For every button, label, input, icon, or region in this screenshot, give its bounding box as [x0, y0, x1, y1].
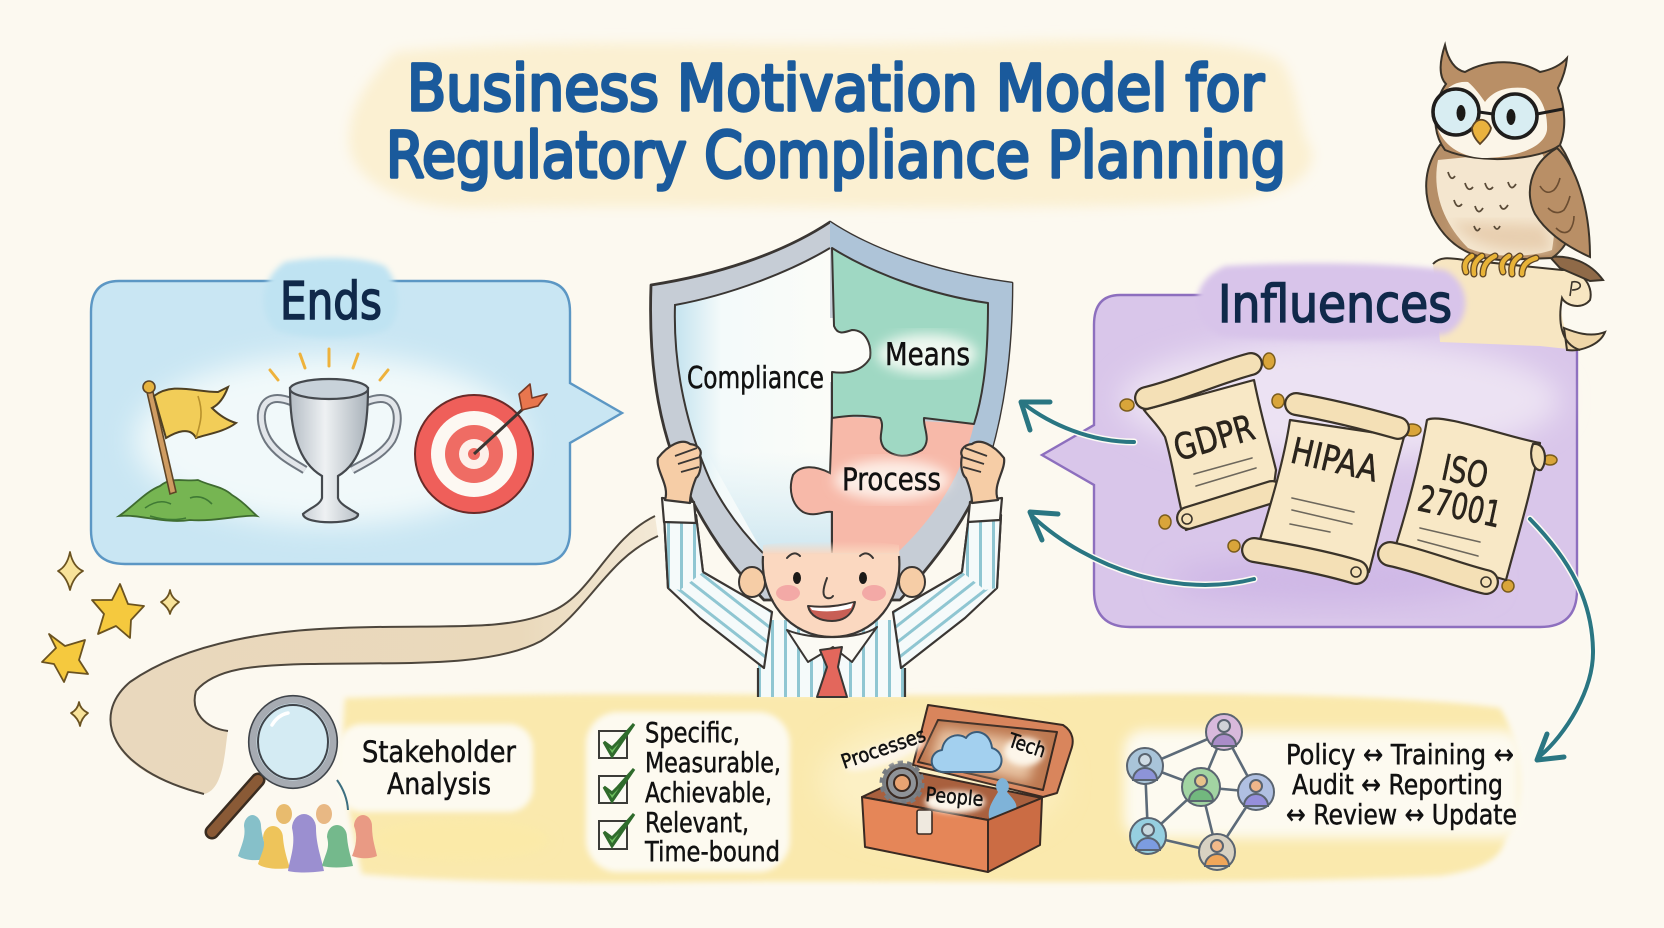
- heading: ends: [263, 258, 398, 338]
- panel: ends: [91, 258, 622, 564]
- collar and tie: [787, 627, 877, 697]
- SMART words: Specific,: [645, 716, 740, 749]
- stakeholder text box: [338, 724, 533, 812]
- node: right: [1238, 774, 1274, 810]
- label: means: Means: [885, 337, 970, 373]
- arrow: influences to means: [1021, 402, 1134, 442]
- gear: [882, 763, 922, 803]
- text: cycle steps: ↔ Review ↔ Update: [1286, 798, 1517, 831]
- icon: owl: [1426, 45, 1603, 281]
- cloud: [932, 732, 1002, 772]
- label glows: [842, 731, 1044, 813]
- compliance tab: [826, 318, 882, 382]
- tool labels: Tech: [1005, 728, 1049, 762]
- body: [1426, 145, 1578, 260]
- heading: ends: Ends: [280, 272, 382, 332]
- stakeholder text box: Analysis: [387, 767, 491, 801]
- node: top: [1206, 714, 1242, 750]
- process outline: [791, 416, 832, 553]
- icon: magnifier: [212, 696, 337, 832]
- node: centre: [1182, 768, 1220, 806]
- heading: influences: [1197, 263, 1465, 340]
- person figure: [989, 778, 1016, 822]
- SMART words: Measurable,: [645, 746, 781, 779]
- SMART words: Time-bound: [644, 835, 780, 868]
- label: compliance: Compliance: [687, 361, 824, 396]
- icon: GDPR scroll: [1120, 353, 1276, 530]
- arrow: influences to process: [1030, 512, 1254, 585]
- checkboxes: [599, 724, 634, 849]
- wing: [1530, 148, 1590, 257]
- head: [1435, 45, 1567, 159]
- head: [739, 541, 925, 637]
- title text: Regulatory Compliance Planning: [386, 119, 1286, 192]
- SMART checklist: [586, 712, 790, 872]
- text: cycle steps: [1286, 738, 1517, 831]
- arrow: influences to workflow: [1530, 519, 1593, 760]
- icon: GDPR scroll: GDPR: [1169, 408, 1259, 470]
- node: bottom: [1199, 834, 1235, 870]
- SMART words: Achievable,: [645, 776, 772, 809]
- icon: trophy: [261, 349, 397, 522]
- shield: [651, 222, 1012, 600]
- claws: [1465, 256, 1536, 274]
- title banner: [349, 40, 1312, 208]
- heading: influences: Influences: [1218, 275, 1452, 335]
- title text: [386, 52, 1286, 192]
- chest marks: [1448, 172, 1516, 231]
- icon: flag on hill: [119, 381, 257, 521]
- path: winding road: [110, 516, 658, 794]
- stakeholder text box: Stakeholder: [362, 735, 516, 769]
- icon: stars: [42, 552, 179, 726]
- owl perch scroll: [1433, 258, 1605, 350]
- face: [1435, 82, 1547, 158]
- puzzle piece: process: [791, 416, 974, 553]
- hands: [658, 442, 1004, 503]
- icon: target with arrow: [415, 384, 547, 513]
- SMART words: [644, 716, 781, 868]
- glasses: [1433, 89, 1479, 135]
- puzzle piece: means: [832, 248, 988, 456]
- icon: ISO 27001 scroll: 27001: [1414, 479, 1505, 536]
- icon: toolbox: [838, 705, 1073, 872]
- SMART words: Relevant,: [645, 806, 749, 839]
- label glow: means: [877, 334, 977, 374]
- icon: stakeholder group: [238, 780, 377, 872]
- tool labels: Processes: [838, 722, 929, 774]
- box front: [862, 797, 988, 872]
- cuffs: [662, 498, 1002, 523]
- panel: action band: [338, 694, 1522, 883]
- text: cycle steps: Audit ↔ Reporting: [1292, 768, 1503, 801]
- tool labels: People: [925, 782, 984, 811]
- icon: ISO 27001 scroll: [1390, 418, 1557, 592]
- node: left: [1127, 748, 1163, 784]
- label: process: Process: [842, 462, 941, 498]
- title text: Business Motivation Model for: [407, 52, 1264, 125]
- icon: HIPAA scroll: [1228, 394, 1421, 577]
- panel: influences: [1042, 295, 1577, 627]
- tool labels: [838, 722, 1049, 811]
- striped sleeves and shirt: [664, 515, 1001, 697]
- box inside: [862, 772, 1042, 820]
- road edges: [110, 516, 658, 794]
- icon: ISO 27001 scroll: ISO: [1438, 448, 1492, 497]
- icon: HIPAA scroll: HIPAA: [1287, 431, 1382, 491]
- tail: [1550, 257, 1603, 281]
- text: cycle steps: Policy ↔ Training ↔: [1286, 738, 1514, 771]
- lid: [913, 705, 1073, 797]
- figure: person holding shield: [651, 222, 1012, 697]
- icon: stakeholder network: [1127, 714, 1274, 870]
- label glow: process: [834, 460, 950, 500]
- network text box: [1124, 730, 1522, 838]
- node: lower left: [1130, 818, 1166, 854]
